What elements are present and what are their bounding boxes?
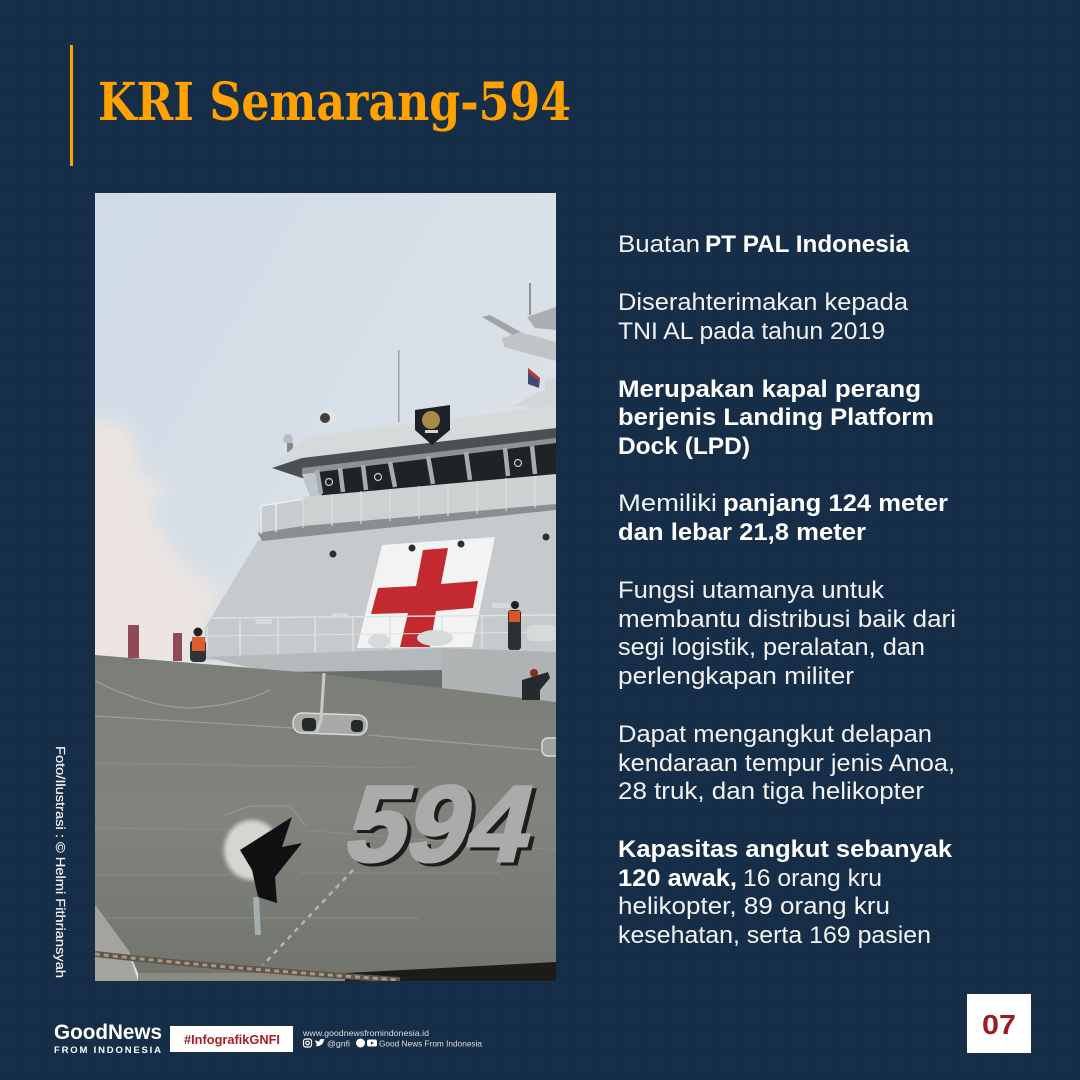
hull lines [95,681,556,918]
water stream [256,897,258,935]
text: main function: perlengkapan militer [618,663,854,690]
text: capacity: Kapasitas angkut sebanyak [618,836,952,863]
icon: twitter [315,1039,325,1046]
crew member right [508,601,521,650]
logo: GoodNews [54,1021,162,1056]
text: dimensions: dan lebar 21,8 meter [618,519,866,546]
text: manufacturer: Buatan [618,231,700,258]
text: vehicles: kendaraan tempur jenis Anoa, [618,750,955,777]
hashtag tag [170,1026,293,1052]
bridge roof [272,405,556,467]
rope [95,954,400,980]
text: ship type: Merupakan kapal perang [618,376,921,403]
page number: 07 [982,1009,1016,1040]
photo: ship KRI Semarang [80,193,562,981]
eave [272,428,556,478]
superstructure wall [205,505,556,660]
text: dimensions: Memiliki [618,490,717,517]
hull number 594: 594 [339,767,551,888]
text: capacity: 16 orang kru [743,865,882,892]
red posts [128,625,182,661]
hashtag tag: #InfografikGNFI [184,1032,280,1047]
website and social: www.goodnewsfromindonesia.id [302,1028,429,1038]
text: vehicles: 28 truk, dan tiga helikopter [618,778,924,805]
text: dimensions [618,490,948,546]
text: main function: Fungsi utamanya untuk [618,577,885,604]
text: capacity: 120 awak, [618,865,737,892]
shadow under deck [296,670,442,688]
text: vehicles: Dapat mengangkut delapan [618,721,932,748]
icon: facebook [356,1038,365,1048]
text: main function: membantu distribusi baik dari [618,606,956,633]
text: main function [618,577,956,690]
searchlights [283,410,337,452]
text: dimensions: panjang 124 meter [723,490,948,517]
text: ship type [618,376,934,460]
text: manufacturer: PT PAL Indonesia [705,231,909,258]
hull number 594 [347,784,537,866]
anchor [224,806,306,903]
railing [207,615,556,655]
crew member left [190,628,206,662]
crew member on hull [522,669,550,700]
red cross panel [357,537,495,648]
lower deck [206,648,442,672]
text: handover: TNI AL pada tahun 2019 [618,318,885,345]
balcony [258,474,556,541]
mooring pipes [293,673,562,756]
rear hull block [442,648,556,705]
dark waterline [345,962,556,981]
text: capacity: helikopter, 89 orang kru [618,893,890,920]
accent bar [70,45,73,166]
text: capacity [618,836,952,949]
text: main function: segi logistik, peralatan, dan [618,634,925,661]
draft marks [263,870,353,965]
quay [95,905,138,981]
text: ship type: Dock (LPD) [618,433,750,460]
hull number 594: 594 [335,764,547,885]
hull [95,655,556,973]
text: capacity: kesehatan, serta 169 pasien [618,922,931,949]
text: handover [618,289,908,345]
mast and radar [398,283,556,422]
text: vehicles [618,721,955,805]
website and social [302,1028,482,1048]
portholes [330,534,550,558]
life raft canisters [255,603,556,648]
sky [95,193,556,981]
text: handover: Diserahterimakan kepada [618,289,908,316]
strip below hull [138,973,345,981]
logo: GoodNews: FROM INDONESIA [54,1045,162,1056]
website and social: Good News From Indonesia [379,1038,482,1048]
title: KRI Semarang-594 [98,72,571,133]
website and social: @gnfi [327,1038,350,1048]
photo credit: Foto/Ilustrasi : © Helmi Fithriansyah [53,746,67,978]
logo: GoodNews: GoodNews [54,1021,162,1044]
emblem [415,405,450,445]
bridge windows [302,443,556,500]
text: ship type: berjenis Landing Platform [618,404,934,431]
text: manufacturer [618,231,909,258]
icon: instagram [304,1039,312,1047]
cloud [95,415,220,663]
page number [967,994,1031,1053]
icon: youtube [367,1040,377,1046]
